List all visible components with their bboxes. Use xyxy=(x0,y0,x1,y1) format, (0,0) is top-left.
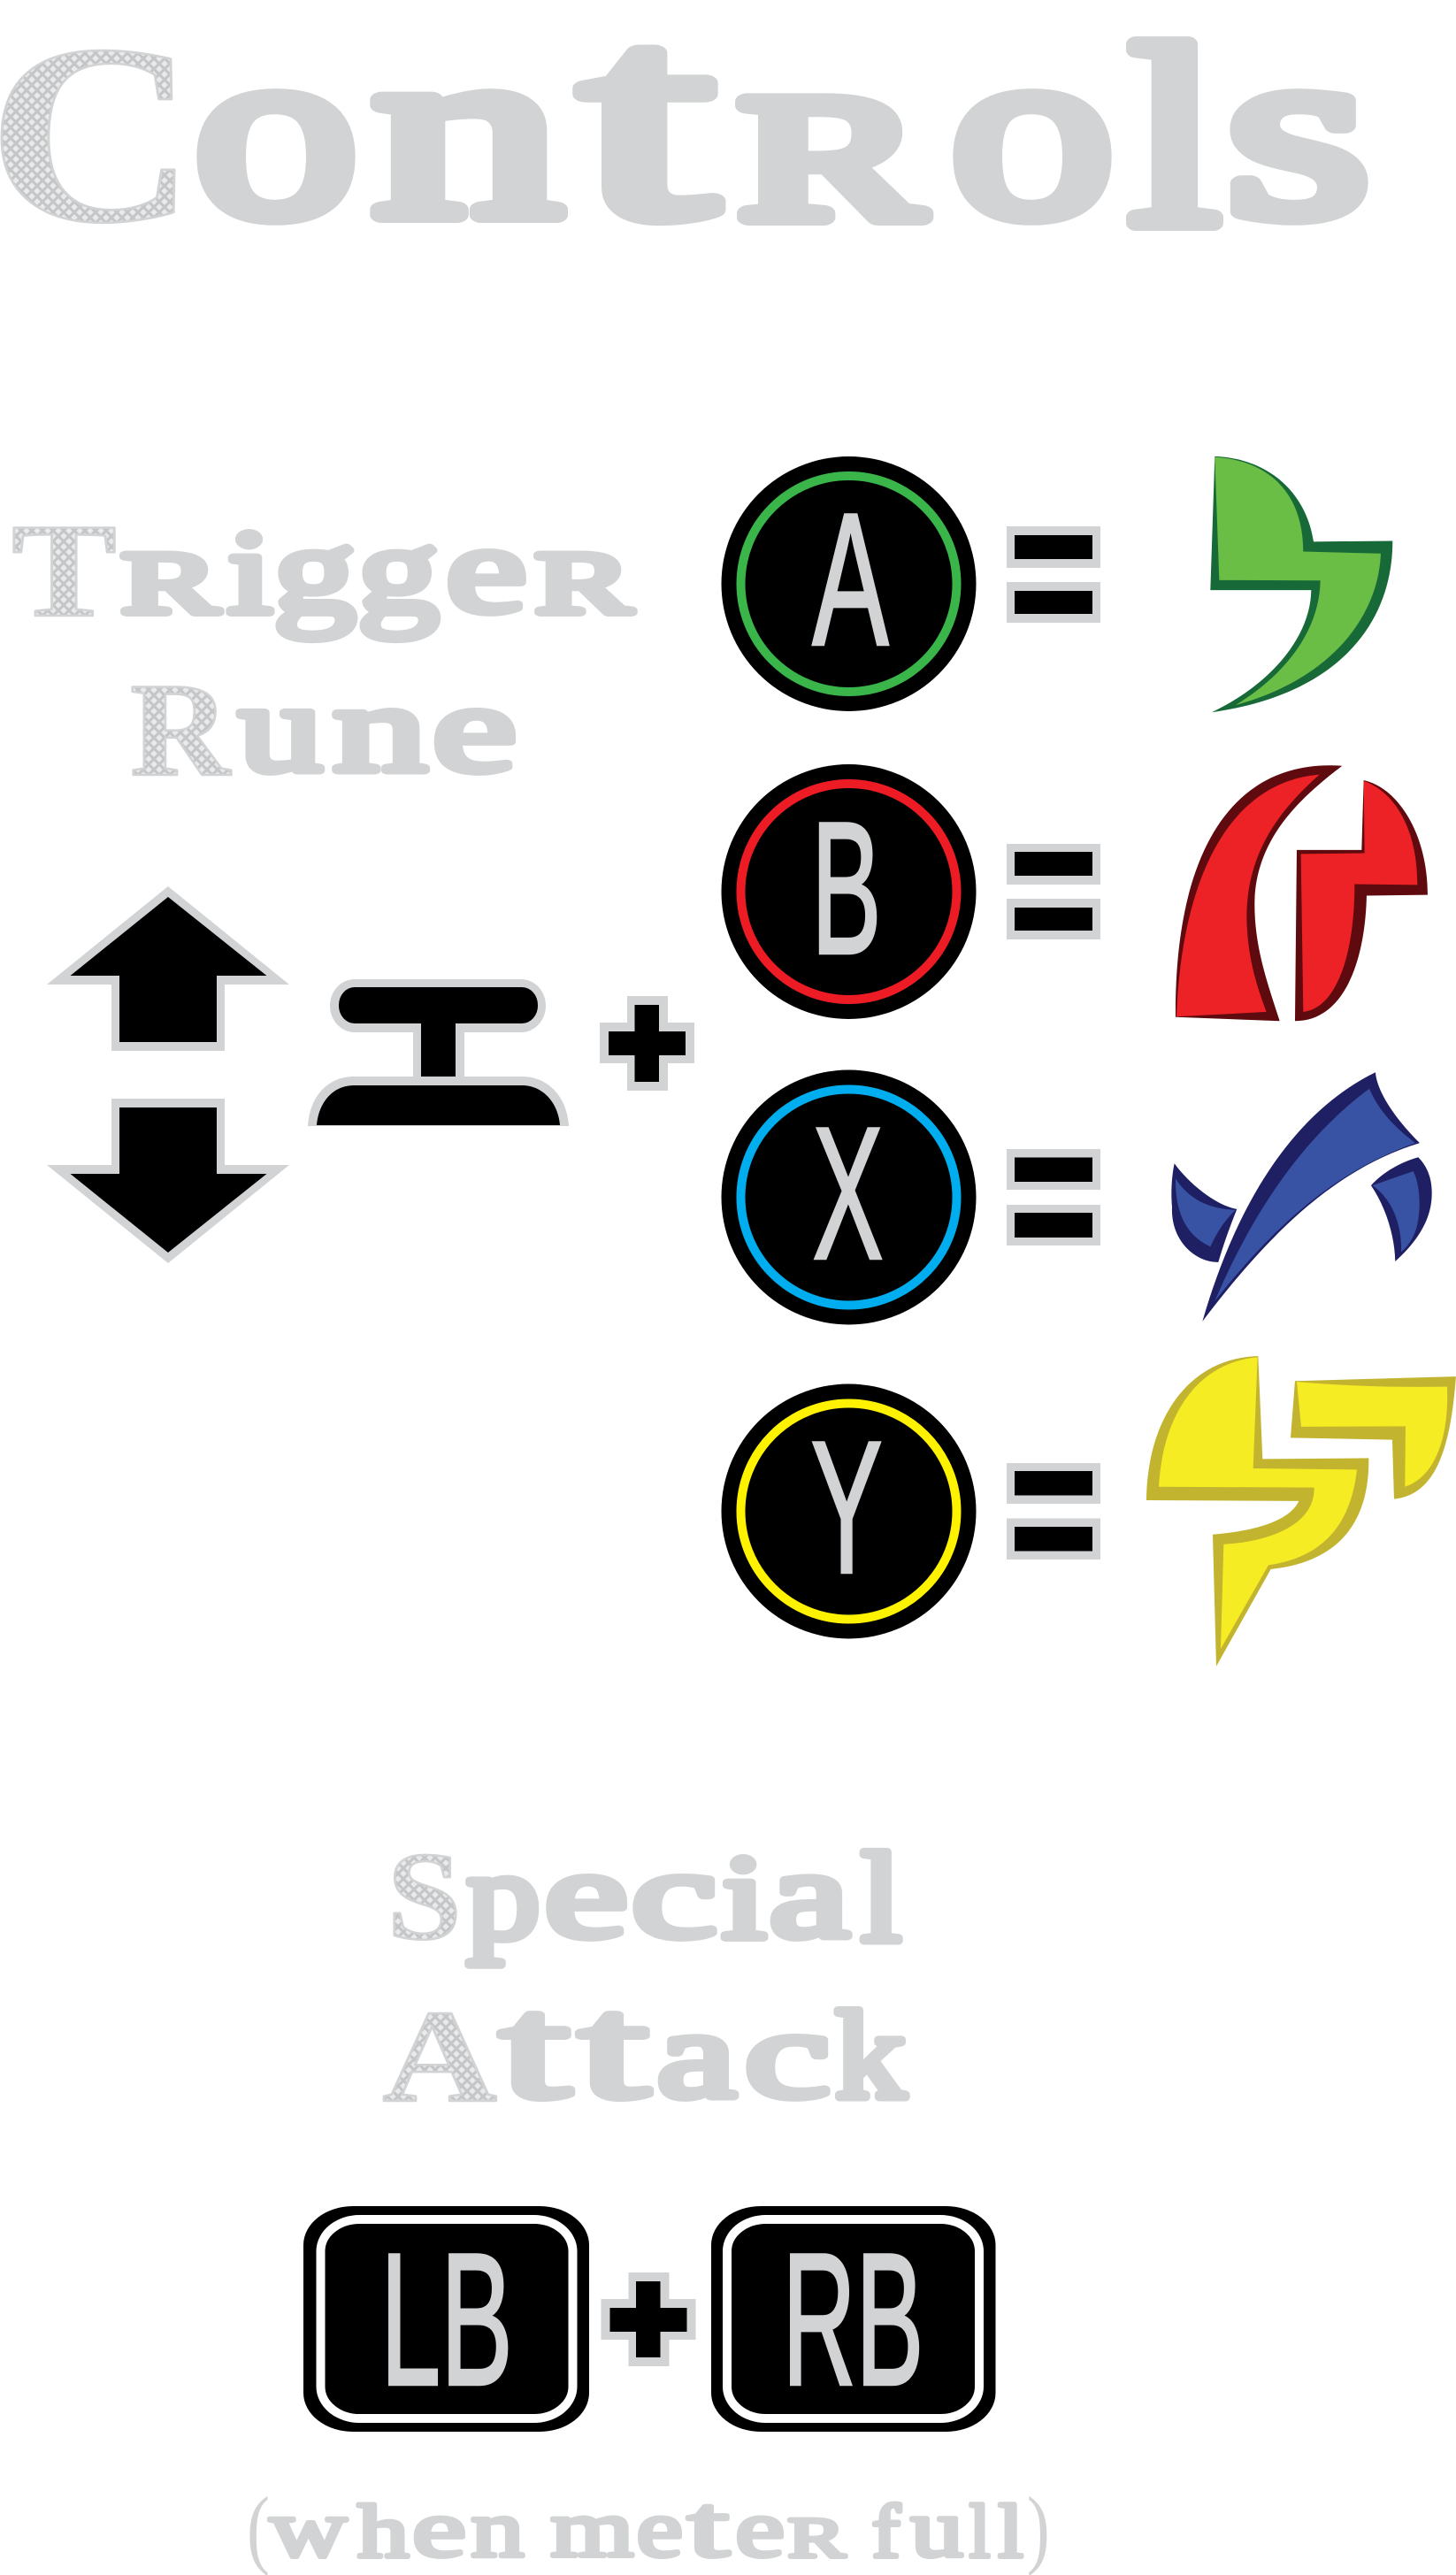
title: Controls: R xyxy=(739,60,922,257)
heading line: Special: e xyxy=(545,1826,628,1964)
caption: when meter full: l xyxy=(969,2489,990,2574)
heading line: Special: a xyxy=(770,1826,849,1964)
icon: plus sign xyxy=(600,996,694,1091)
button: Y xyxy=(722,1383,977,1638)
button: A: A xyxy=(812,475,889,685)
heading line: Rune: u xyxy=(239,658,323,798)
caption: when meter full: e xyxy=(412,2484,466,2574)
heading line: Special: l xyxy=(861,1828,901,1969)
icon: down arrow xyxy=(47,1099,289,1263)
heading line: Rune: R xyxy=(130,655,232,804)
caption: when meter full: e xyxy=(735,2484,785,2574)
heading line: Special: S xyxy=(387,1826,462,1966)
caption: when meter full: e xyxy=(637,2484,683,2574)
heading line: Attack: a xyxy=(657,1986,736,2124)
rune: green xyxy=(1210,456,1392,712)
button: LB xyxy=(303,2206,589,2432)
button: A xyxy=(722,456,977,711)
heading line: Trigger: g xyxy=(273,500,356,640)
heading line: Trigger: e xyxy=(446,501,526,639)
caption: when meter full: ) xyxy=(1027,2479,1050,2575)
equals sign: A xyxy=(1007,526,1100,623)
button: B: B xyxy=(811,783,882,993)
rune: blue xyxy=(1171,1072,1432,1322)
title: Controls: l xyxy=(1130,0,1220,279)
heading line: Special: c xyxy=(632,1826,717,1964)
title: Controls: n xyxy=(373,0,562,270)
icon: plus sign xyxy=(602,2272,695,2366)
caption: when meter full: R xyxy=(788,2507,846,2571)
icon: joystick xyxy=(308,979,569,1126)
heading line: Trigger: T xyxy=(11,496,117,645)
title: Controls: o xyxy=(951,0,1114,270)
caption: when meter full: l xyxy=(999,2489,1023,2574)
heading line: Trigger: R xyxy=(122,534,218,632)
caption: when meter full: w xyxy=(270,2484,348,2574)
button: RB: RB xyxy=(782,2215,923,2426)
button: X xyxy=(722,1070,977,1325)
caption: when meter full: ( xyxy=(247,2479,270,2575)
icon: up arrow xyxy=(47,886,289,1051)
heading line: Attack: t xyxy=(501,1968,570,2128)
caption: when meter full: f xyxy=(872,2489,900,2574)
title: Controls: o xyxy=(195,0,357,270)
button: LB: LB xyxy=(380,2214,513,2425)
heading line: Rune: n xyxy=(333,660,427,798)
heading line: Trigger: g xyxy=(357,500,439,640)
heading line: Rune: e xyxy=(433,660,517,798)
caption: when meter full: m xyxy=(551,2484,633,2574)
heading line: Attack: c xyxy=(745,1986,830,2124)
button: RB xyxy=(711,2206,996,2432)
button: Y: Y xyxy=(811,1401,882,1613)
heading line: Trigger: R xyxy=(536,534,632,632)
equals sign: Y xyxy=(1007,1463,1100,1560)
equals sign: B xyxy=(1007,844,1100,939)
button: B xyxy=(722,764,977,1019)
equals sign: X xyxy=(1007,1149,1100,1245)
heading: Special Attack xyxy=(382,1826,906,2130)
caption: when meter full: t xyxy=(687,2477,730,2575)
heading line: Special: p xyxy=(467,1826,540,1966)
heading line: Special: i xyxy=(723,1831,766,1964)
heading line: Attack: A xyxy=(382,1983,497,2130)
rune: yellow xyxy=(1146,1356,1456,1667)
title: Controls: s xyxy=(1226,0,1369,270)
heading: Trigger Rune xyxy=(11,496,632,804)
heading line: Trigger: i xyxy=(228,506,272,639)
heading line: Attack: t xyxy=(579,1968,648,2128)
button: X: X xyxy=(813,1088,883,1299)
caption: when meter full: u xyxy=(911,2484,963,2574)
heading line: Attack: k xyxy=(835,1985,906,2125)
rune: red xyxy=(1176,765,1428,1021)
caption: when meter full: h xyxy=(357,2489,409,2574)
caption: when meter full: n xyxy=(471,2484,524,2574)
